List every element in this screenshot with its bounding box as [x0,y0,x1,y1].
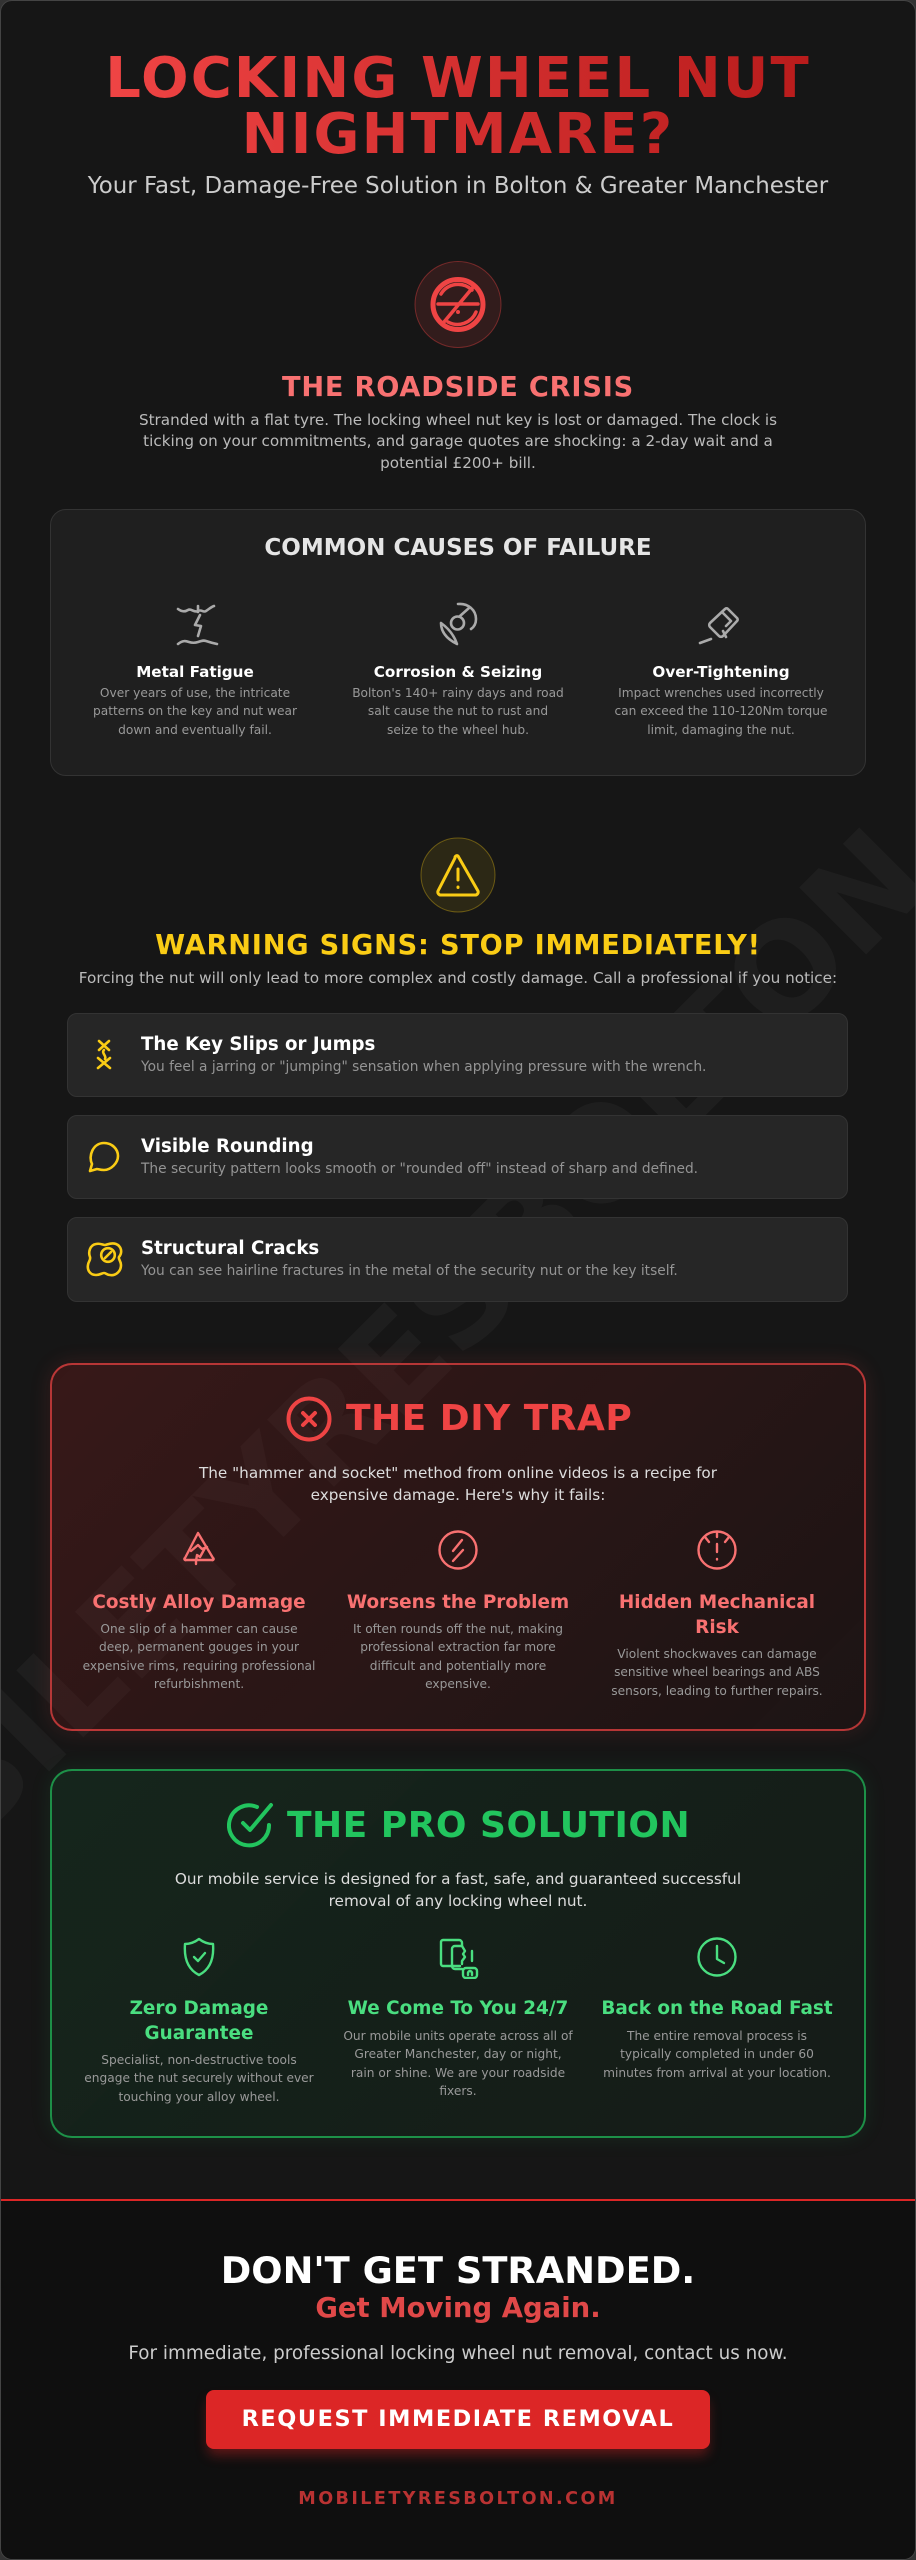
text: back on the road description: typically completed in under 60 [620,2047,814,2061]
heading: common causes: COMMON CAUSES OF FAILURE [264,535,652,561]
text: zero damage title: Zero Damage [130,1998,268,2019]
text: zero damage title [130,1998,268,2044]
text: we come to you title: We Come To You 24/7 [348,1998,568,2019]
text: back on the road description: minutes from arrival at your location. [603,2066,831,2080]
text: hidden risk description: sensitive wheel bearings and ABS [614,1665,820,1679]
text: we come to you description [343,2029,573,2098]
text: pro intro: removal of any locking wheel nut. [329,1892,587,1910]
icon: mobile unit [440,1938,478,1979]
card: structural cracks [67,1217,848,1302]
icon: hidden mechanical risk [697,1530,737,1570]
icon: alloy damage [183,1532,215,1566]
text: pro intro [175,1870,741,1910]
text: metal fatigue: Metal Fatigue [136,663,254,681]
panel: the DIY trap [50,1363,866,1731]
text: back on the road description [603,2029,831,2080]
title: NIGHTMARE? [242,102,674,166]
text: we come to you description: fixers. [439,2084,477,2098]
text: structural cracks title: Structural Cracks [141,1238,319,1259]
text: worsens problem description: difficult and potentially more [370,1659,546,1673]
icon: structural cracks [86,1242,122,1276]
heading: the roadside crisis: THE ROADSIDE CRISIS [282,372,634,403]
text: alloy damage description: deep, permanent gouges in your [99,1640,299,1654]
heading: the pro solution: THE PRO SOLUTION [287,1805,690,1846]
text: worsens problem description: professional extraction far more [360,1640,556,1654]
text: metal fatigue description [93,686,297,737]
button: request immediate removal [206,2390,710,2449]
text: worsens problem title: Worsens the Problem [347,1592,569,1613]
text: hidden risk description: Violent shockwaves can damage [617,1647,817,1661]
text: worsens problem description [353,1622,563,1691]
panel: common causes of failure [50,509,866,776]
footer heading: DON'T GET STRANDED. [221,2249,695,2292]
text: key slips title: The Key Slips or Jumps [141,1034,375,1055]
text: corrosion description [352,686,564,737]
icon: shield check [184,1938,214,1976]
text: we come to you description: rain or shine. We are your roadside [351,2066,565,2080]
text: zero damage description: Specialist, non-destructive tools [101,2053,297,2067]
icon: speech bubble [88,1142,120,1172]
text: zero damage description: touching your alloy wheel. [118,2090,280,2104]
icon: flat tyre prohibited [414,261,502,348]
icon: corrosion [440,602,478,646]
text: corrosion description: Bolton's 140+ rainy days and road [352,686,564,700]
text: hidden risk title [619,1592,815,1638]
icon: warning triangle [420,838,496,912]
text: alloy damage description: refurbishment. [154,1677,244,1691]
text: alloy damage description: One slip of a hammer can cause [100,1622,298,1636]
heading: warning signs: WARNING SIGNS: STOP IMMEDIATELY! [155,930,761,961]
text: back on the road description: The entire removal process is [627,2029,807,2043]
text: metal fatigue description: patterns on the key and nut wear [93,704,297,718]
icon: worsens problem [438,1530,478,1570]
text: metal fatigue description: Over years of use, the intricate [100,686,290,700]
text: zero damage description: engage the nut securely without ever [84,2071,314,2085]
text: over-tightening: Over-Tightening [652,663,790,681]
subtitle: Your Fast, Damage-Free Solution in Bolton & Greater Manchester [88,173,828,199]
icon: check circle [227,1802,274,1848]
heading: the DIY trap: THE DIY TRAP [346,1398,632,1439]
footer text: For immediate, professional locking wheel nut removal, contact us now. [128,2343,788,2364]
text: corrosion description: seize to the wheel hub. [387,723,529,737]
icon: clock [697,1937,737,1977]
text: structural cracks description: You can see hairline fractures in the metal of the security nut or the key itself. [141,1263,678,1279]
text: visible rounding title: Visible Rounding [141,1136,314,1157]
panel: the pro solution [50,1769,866,2138]
text: key slips description: You feel a jarring or "jumping" sensation when applying pressure with the wrench. [141,1059,706,1075]
text: metal fatigue description: down and eventually fail. [118,723,272,737]
icon: metal fatigue [176,604,218,646]
title: LOCKING WHEEL NUT [105,46,811,111]
text: zero damage title: Guarantee [145,2023,253,2044]
text: DIY intro: The "hammer and socket" method from online videos is a recipe for [199,1464,717,1482]
icon: over-tightening [698,607,739,644]
text: DIY intro [198,1464,718,1504]
text: we come to you description: Our mobile units operate across all of [343,2029,573,2043]
title [0,51,916,162]
text: over-tightening description: Impact wrenches used incorrectly [618,686,824,700]
footer panel [0,2199,916,2560]
text: corrosion and seizing: Corrosion & Seizing [374,663,542,681]
text: pro intro: Our mobile service is designed for a fast, safe, and guaranteed successful [175,1870,741,1888]
text: over-tightening description [614,686,828,737]
icon: x circle [286,1396,332,1442]
text: hidden risk title: Risk [695,1617,739,1638]
website url: MOBILETYRESBOLTON.COM [298,2489,618,2509]
card: visible rounding [67,1115,848,1199]
text: alloy damage description [83,1622,315,1691]
text: visible rounding description: The security pattern looks smooth or "rounded off" instead of sharp and defined. [141,1161,698,1177]
text: alloy damage description: expensive rims, requiring professional [83,1659,315,1673]
text: worsens problem description: It often rounds off the nut, making [353,1622,563,1636]
button: request immediate removal: REQUEST IMMEDIATE REMOVAL [242,2406,674,2432]
text: we come to you description: Greater Manchester, day or night, [354,2047,562,2061]
text: worsens problem description: expensive. [425,1677,491,1691]
text: corrosion description: salt cause the nut to rust and [368,704,548,718]
text: crisis description: ticking on your commitments, and garage quotes are shocking: a 2-day wait and a [143,432,773,450]
text: warning intro: Forcing the nut will only lead to more complex and costly damage. Call a professional if you notice: [79,969,837,987]
card: key slips [67,1013,848,1097]
text: alloy damage title: Costly Alloy Damage [92,1592,306,1613]
text: hidden risk description [611,1647,823,1698]
footer subheading: Get Moving Again. [315,2292,601,2324]
text: hidden risk description: sensors, leading to further repairs. [611,1684,823,1698]
text: DIY intro: expensive damage. Here's why it fails: [311,1486,605,1504]
text: crisis description [139,411,777,472]
text: over-tightening description: limit, damaging the nut. [647,723,795,737]
icon: key slips [96,1040,112,1070]
text: back on the road title: Back on the Road Fast [601,1998,833,2019]
text: hidden risk title: Hidden Mechanical [619,1592,815,1613]
text: crisis description: Stranded with a flat tyre. The locking wheel nut key is lost or damaged. The clock is [139,411,777,429]
text: over-tightening description: can exceed the 110-120Nm torque [614,704,828,718]
text: crisis description: potential £200+ bill. [380,454,536,472]
text: zero damage description [84,2053,314,2104]
